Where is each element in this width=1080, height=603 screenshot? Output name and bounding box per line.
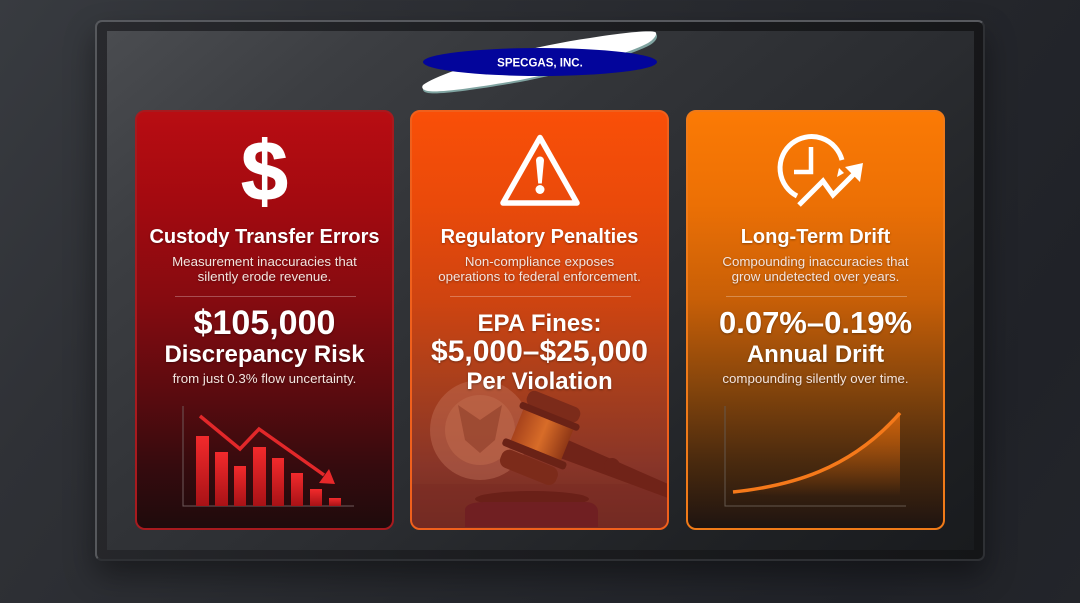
- screen panel: [107, 31, 974, 550]
- heading: long-term drift: Long-Term Drift: [741, 226, 890, 248]
- description: regulatory: [438, 254, 641, 285]
- chart: exponential drift curve: [724, 406, 906, 506]
- stat: annual drift: [719, 305, 912, 368]
- heading: regulatory penalties: Regulatory Penalties: [441, 226, 638, 248]
- stat: epa fines per violation: Per Violation: [466, 368, 613, 395]
- icon: dollar sign: $: [241, 124, 288, 218]
- description: drift: [722, 254, 909, 286]
- panel: custody transfer errors: [135, 110, 394, 530]
- stat: epa fines per violation: $5,000–$25,000: [431, 335, 648, 368]
- icon: warning triangle: [500, 134, 580, 206]
- description: regulatory: operations to federal enforcement.: [438, 269, 641, 284]
- stat: epa fines per violation: EPA Fines:: [477, 310, 602, 337]
- chart: falling bars with down arrow: [182, 406, 354, 506]
- description: custody: Measurement inaccuracies that: [172, 254, 357, 269]
- description: drift: grow undetected over years.: [732, 269, 899, 284]
- stat note: flow uncertainty: from just 0.3% flow uncertainty.: [173, 371, 356, 386]
- stat: 105,000 discrepancy risk: $105,000: [194, 304, 335, 342]
- icon: clock with rising arrow: [778, 134, 863, 207]
- stat: epa fines per violation: [430, 310, 648, 395]
- description: regulatory: Non-compliance exposes: [465, 254, 614, 269]
- logo: Specgas: [422, 31, 657, 94]
- description: custody: silently erode revenue.: [198, 269, 331, 284]
- stat: annual drift: 0.07%–0.19%: [719, 305, 912, 340]
- description: custody: [172, 254, 357, 285]
- logo: Specgas: SPECGAS, INC.: [497, 58, 583, 70]
- panel: long-term drift: [686, 110, 945, 530]
- stat: annual drift: Annual Drift: [747, 341, 884, 368]
- monitor frame: [95, 20, 985, 561]
- stat: 105,000 discrepancy risk: [164, 304, 365, 368]
- illustration: gavel and seal: [412, 380, 667, 528]
- stat note: compounding: compounding silently over time.: [722, 371, 909, 386]
- panel: regulatory penalties: [410, 110, 669, 530]
- stat: 105,000 discrepancy risk: Discrepancy Risk: [164, 341, 365, 368]
- heading: custody transfer errors: Custody Transfer Errors: [149, 226, 380, 248]
- description: drift: Compounding inaccuracies that: [722, 254, 909, 269]
